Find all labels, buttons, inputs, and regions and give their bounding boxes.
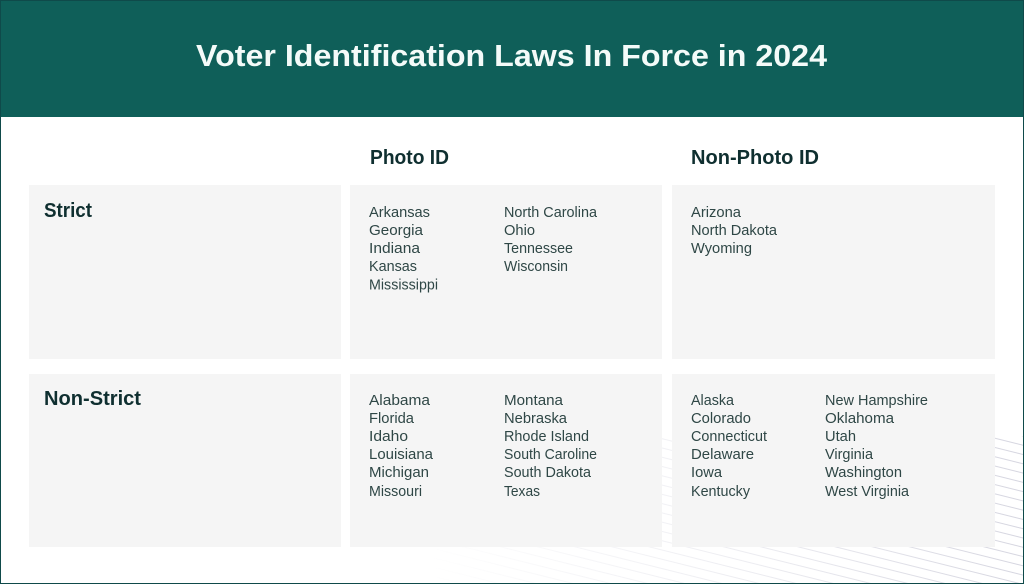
list: Non-Strict Photo ID column 2: Rhode Island — [504, 429, 589, 445]
list: Non-Strict Photo ID column 1: Idaho — [369, 429, 408, 445]
list: Non-Strict Photo ID column 1: Louisiana — [369, 447, 434, 463]
list: Strict Non-Photo ID — [691, 205, 778, 257]
title: Voter Identification Laws In Force in 2024 — [196, 38, 828, 73]
panel: Non-Strict Non-Photo ID — [672, 374, 995, 547]
list: Non-Strict Non-Photo ID column 1: Iowa — [691, 465, 723, 481]
list: Strict Non-Photo ID: Arizona — [691, 205, 742, 221]
list: Non-Strict Non-Photo ID column 2: Virginia — [825, 447, 874, 463]
heading: Strict: Strict — [44, 200, 92, 222]
list: Non-Strict Photo ID column 1: Florida — [369, 411, 415, 427]
list: Strict Photo ID column 2: Wisconsin — [504, 259, 568, 275]
list: Non-Strict Photo ID column 1 — [369, 393, 434, 500]
list: Non-Strict Non-Photo ID column 2 — [825, 393, 928, 500]
list: Non-Strict Non-Photo ID column 1: Delaware — [691, 447, 754, 463]
heading: Non-Strict: Non-Strict — [44, 388, 141, 410]
list: Non-Strict Non-Photo ID column 1: Kentucky — [691, 484, 751, 500]
list: Non-Strict Photo ID column 1: Alabama — [369, 393, 431, 409]
list: Non-Strict Non-Photo ID column 2: West Virginia — [825, 484, 910, 500]
list: Strict Photo ID column 2 — [504, 205, 598, 275]
list: Non-Strict Photo ID column 2: South Dakota — [504, 465, 592, 481]
list: Strict Photo ID column 2: North Carolina — [504, 205, 598, 221]
panel: Strict Non-Photo ID — [672, 185, 995, 359]
list: Non-Strict Non-Photo ID column 2: Washington — [825, 465, 902, 481]
list: Strict Photo ID column 1: Kansas — [369, 259, 417, 275]
column heading: Non-Photo ID: Non-Photo ID — [691, 147, 819, 169]
column heading: Photo ID: Photo ID — [370, 147, 449, 169]
list: Strict Non-Photo ID: Wyoming — [691, 241, 752, 257]
list: Strict Photo ID column 1: Indiana — [369, 241, 421, 257]
list: Non-Strict Non-Photo ID column 1 — [691, 393, 767, 500]
list: Non-Strict Photo ID column 2: South Caroline — [504, 447, 597, 463]
list: Non-Strict Photo ID column 1: Missouri — [369, 484, 422, 500]
list: Non-Strict Photo ID column 2: Montana — [504, 393, 564, 409]
list: Non-Strict Photo ID column 2 — [504, 393, 597, 500]
panel: Non-Strict Photo ID — [350, 374, 662, 547]
list: Non-Strict Non-Photo ID column 2: Utah — [825, 429, 856, 445]
list: Non-Strict Photo ID column 1: Michigan — [369, 465, 429, 481]
list: Non-Strict Non-Photo ID column 1: Colorado — [691, 411, 751, 427]
list: Strict Photo ID column 2: Tennessee — [504, 241, 573, 257]
header band — [0, 0, 1024, 117]
panel: Strict Photo ID — [350, 185, 662, 359]
panel: Strict row label — [29, 185, 341, 359]
list: Strict Photo ID column 1 — [369, 205, 438, 294]
list: Non-Strict Photo ID column 2: Nebraska — [504, 411, 568, 427]
list: Non-Strict Photo ID column 2: Texas — [504, 484, 540, 500]
list: Strict Photo ID column 1: Arkansas — [369, 205, 430, 221]
list: Non-Strict Non-Photo ID column 2: Oklahoma — [825, 411, 895, 427]
list: Strict Photo ID column 2: Ohio — [504, 223, 535, 239]
list: Strict Non-Photo ID: North Dakota — [691, 223, 778, 239]
list: Strict Photo ID column 1: Mississippi — [369, 278, 438, 294]
panel: Non-Strict row label — [29, 374, 341, 547]
list: Non-Strict Non-Photo ID column 1: Alaska — [691, 393, 735, 409]
list: Strict Photo ID column 1: Georgia — [369, 223, 424, 239]
list: Non-Strict Non-Photo ID column 2: New Hampshire — [825, 393, 928, 409]
list: Non-Strict Non-Photo ID column 1: Connecticut — [691, 429, 767, 445]
